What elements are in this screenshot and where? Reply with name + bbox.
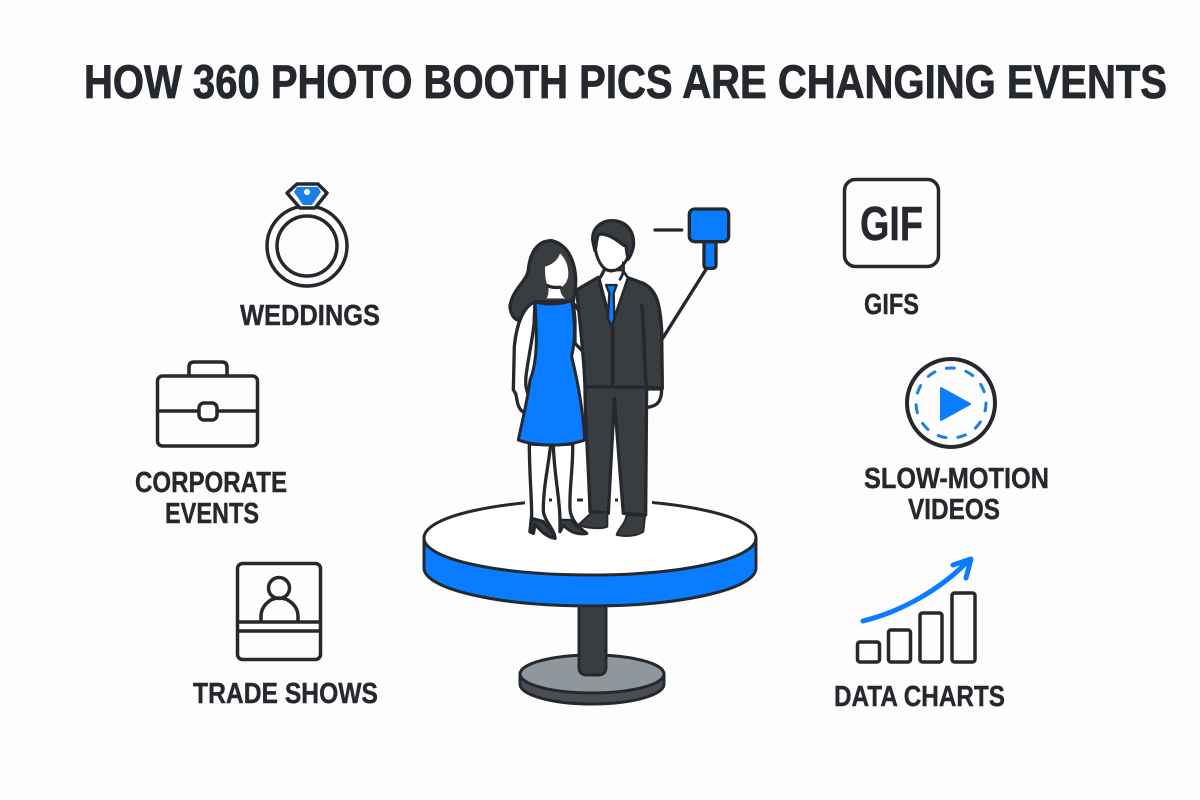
neck [599, 263, 624, 279]
far arm [573, 303, 584, 353]
platform pole [579, 604, 606, 675]
item: weddings [240, 184, 380, 332]
label: corporate events [135, 467, 287, 530]
icon: play button [907, 359, 995, 447]
hair [593, 221, 634, 259]
shirt [599, 270, 628, 326]
woman [510, 241, 587, 538]
platform disc [424, 494, 756, 606]
item: data charts [834, 559, 1005, 713]
legs [529, 444, 555, 538]
shoes [578, 513, 607, 528]
item: trade shows [193, 564, 378, 710]
label: slow-motion videos: VIDEOS [908, 494, 1000, 526]
icon: rising bar chart with arrow [858, 559, 975, 662]
blue dress [518, 301, 585, 445]
label: slow-motion videos [864, 463, 1049, 526]
trousers [585, 387, 647, 515]
hand [647, 389, 662, 407]
label: corporate events: EVENTS [165, 498, 259, 530]
neck and face [545, 253, 568, 298]
platform base [520, 655, 664, 704]
label: data charts: DATA CHARTS [834, 681, 1005, 713]
icon: briefcase [158, 362, 258, 446]
label: slow-motion videos: SLOW-MOTION [864, 463, 1049, 495]
face [595, 227, 631, 271]
icon: trade show booth [238, 564, 320, 660]
label: weddings: WEDDINGS [240, 300, 380, 332]
suit jacket [577, 277, 662, 388]
item: gifs [844, 180, 938, 321]
item: slow-motion videos [864, 359, 1049, 526]
label: gifs: GIFS [864, 289, 919, 321]
label: corporate events: CORPORATE [135, 467, 287, 499]
label: trade shows: TRADE SHOWS [193, 678, 378, 710]
man [577, 221, 662, 536]
selfie stick with camera [655, 209, 729, 338]
hair [510, 241, 576, 320]
couple with selfie stick [510, 209, 729, 538]
near arm [513, 302, 535, 412]
icon: diamond ring [267, 184, 347, 286]
tie [606, 285, 617, 327]
item: corporate events [135, 362, 287, 530]
icon: gif frame [844, 180, 938, 266]
icon: gif frame: GIF [860, 198, 923, 251]
rotating platform [424, 494, 756, 704]
shoes [530, 518, 555, 538]
